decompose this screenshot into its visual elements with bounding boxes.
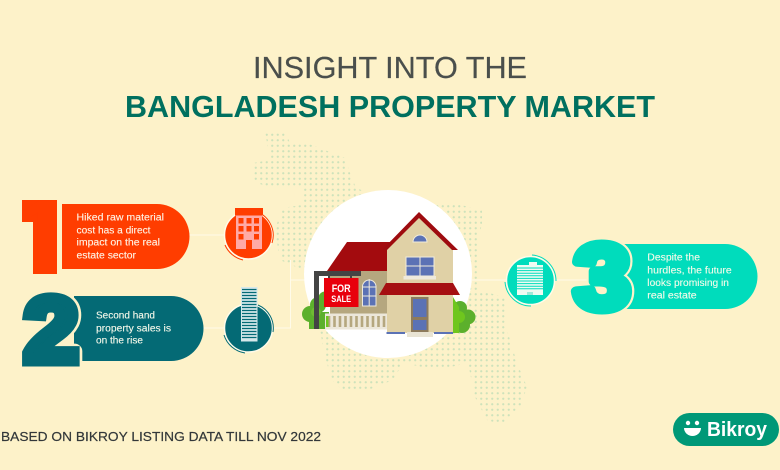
text 3: real estate xyxy=(647,291,697,302)
panel: point 1 xyxy=(22,200,190,274)
text 3 xyxy=(647,253,732,302)
number 3: 3 xyxy=(574,226,630,328)
title xyxy=(125,51,655,124)
house illustration xyxy=(302,212,476,337)
pill 3 xyxy=(620,244,758,309)
number 1 xyxy=(22,200,57,274)
left roof xyxy=(327,242,392,271)
number 2: 2 xyxy=(24,279,78,382)
text 1 xyxy=(76,212,164,261)
central white circle xyxy=(304,190,472,358)
panel: point 2 xyxy=(24,279,204,382)
text 2: Second hand xyxy=(96,311,155,322)
number 2: 2 xyxy=(24,279,78,382)
pill 2 xyxy=(74,296,204,361)
pill 1 xyxy=(62,204,190,269)
text 1: estate sector xyxy=(76,250,137,261)
main body xyxy=(387,217,453,333)
for sale sign xyxy=(324,278,358,307)
attic window xyxy=(413,235,427,242)
panel: point 3 xyxy=(574,226,758,328)
door xyxy=(411,297,428,332)
title: INSIGHT INTO THE xyxy=(253,51,527,85)
logo: Bikroy xyxy=(673,413,779,446)
number 1: 1 xyxy=(14,179,71,293)
left wing wall xyxy=(330,271,388,321)
text 1: impact on the real xyxy=(76,238,160,249)
connector lines xyxy=(189,235,590,328)
for sale sign: FOR xyxy=(332,283,351,295)
text 2 xyxy=(96,311,171,347)
text 3: looks promising in xyxy=(647,278,729,289)
text 2: on the rise xyxy=(96,336,143,347)
steps and base xyxy=(386,332,453,337)
footnote: BASED ON BIKROY LISTING DATA TILL NOV 2022 xyxy=(1,430,321,444)
title: BANGLADESH PROPERTY MARKET xyxy=(125,90,655,124)
number 3: 3 xyxy=(574,226,630,328)
gable roof xyxy=(382,212,458,250)
text 2: property sales is xyxy=(96,323,171,334)
for sale sign: SALE xyxy=(331,294,351,304)
text 3: Despite the xyxy=(647,253,700,264)
text 1: cost has a direct xyxy=(76,225,151,236)
porch roof xyxy=(379,283,460,295)
fence xyxy=(325,314,387,330)
icon: mint tower xyxy=(505,255,556,306)
icon: teal tower xyxy=(224,287,273,353)
upper window xyxy=(404,257,436,280)
text 3: hurdles, the future xyxy=(647,265,732,276)
icon: orange building xyxy=(224,208,273,260)
dotted map of Bangladesh xyxy=(253,131,527,425)
bushes xyxy=(302,292,476,333)
text 1: Hiked raw material xyxy=(76,212,164,224)
sign post xyxy=(316,274,361,329)
arched window xyxy=(362,279,376,306)
sign hooks xyxy=(329,276,351,278)
logo: Bikroy: Bikroy xyxy=(707,419,768,441)
